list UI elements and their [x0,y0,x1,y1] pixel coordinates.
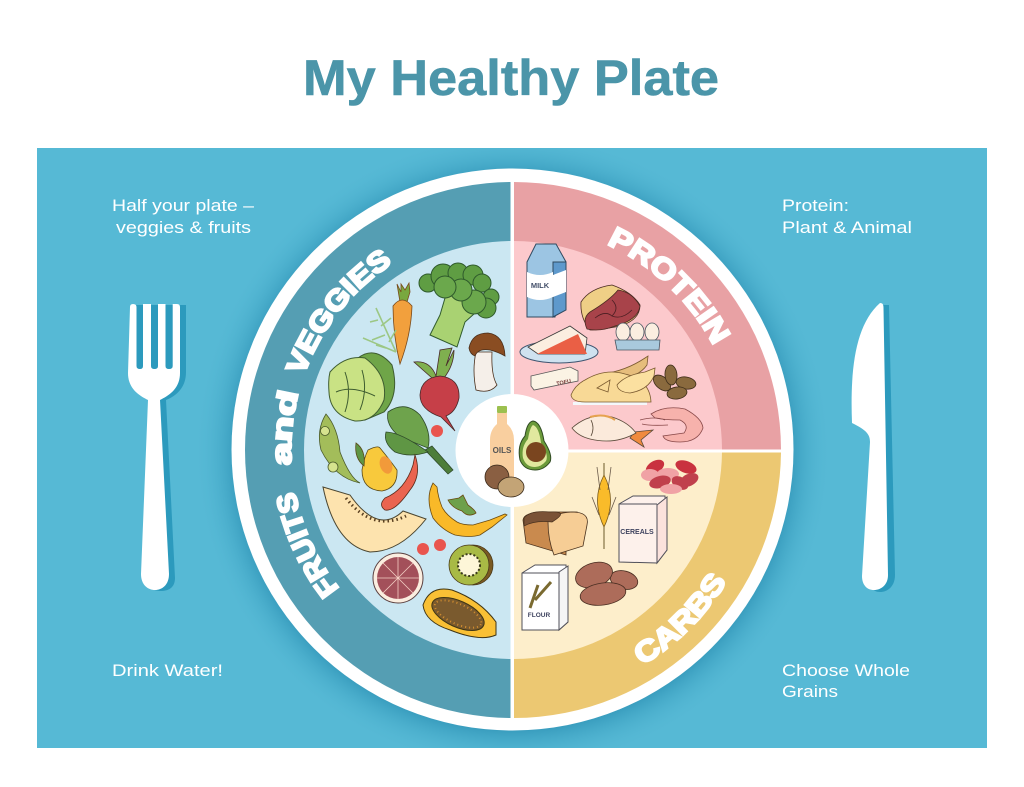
food: broccoli [419,263,499,347]
food: fish [572,416,653,447]
curved label: fruits and veggies [274,250,390,600]
curved label: fruits and veggies: FRUITS [276,492,340,600]
food: spinach [385,407,453,474]
food: chili [382,455,418,510]
plate [232,168,794,730]
curved label: fruits and veggies: and [274,390,300,466]
food: roast chicken [571,356,655,405]
food: potatoes [572,558,640,608]
label: drink water: Drink Water! [112,661,223,680]
label: whole grains [782,661,910,701]
food: carrot [393,283,412,364]
food: cheese on plate [520,326,598,363]
food: cabbage [329,353,395,421]
food: mushroom [469,333,505,391]
inner: veggies [304,241,510,659]
label: half your plate [112,196,255,237]
band: protein [514,182,781,450]
food: rosemary [363,308,396,352]
food: almonds [650,365,697,400]
food: shrimp [640,408,703,442]
food: banana [429,483,507,536]
food: tofu [531,367,578,390]
cereals text: CEREALS [620,529,654,536]
food: wheat [592,463,616,549]
curved label: carbs: CARBS [634,573,725,662]
inner: carbs [514,452,722,659]
label: protein: Plant & Animal [782,218,912,237]
band: carbs [514,452,781,718]
food: beet [414,348,459,431]
plate shadow [216,155,810,748]
milk text: MILK [531,281,550,290]
placemat panel [37,148,987,748]
plate rim [232,168,794,730]
food: papaya [423,589,496,638]
label: whole grains: Grains [782,682,838,701]
food: pod [319,414,360,483]
food: tofu: TOFU [556,379,572,388]
food: oil bottle [490,406,514,482]
food: grapefruit [373,553,423,603]
label: half your plate: veggies & fruits [116,218,251,237]
inner: protein [514,241,722,450]
curved label: protein: PROTEIN [607,226,732,346]
food: milk carton [527,244,566,317]
food: melon [323,487,426,552]
food: bread loaf [523,512,587,555]
food: meat [581,285,640,330]
label: protein: Protein: [782,196,849,215]
food: kidney beans [641,457,701,494]
food: flour bag [522,565,568,630]
centre circle [456,394,568,507]
curved label: fruits and veggies: VEGGIES [284,250,390,370]
food: cereals box [619,496,667,563]
icon: knife [852,303,895,592]
food: walnuts [485,465,524,497]
oils text: OILS [493,446,512,455]
flour text: FLOUR [528,612,550,619]
food: berries [417,425,446,555]
label: half your plate: Half your plate – [112,196,255,215]
band: fruits and veggies [245,182,510,718]
food: avocado [519,421,551,470]
label: whole grains: Choose Whole [782,661,910,680]
title: My Healthy Plate [303,50,719,106]
icon: fork [128,304,186,591]
food: pear [356,443,397,491]
food: eggs [615,323,660,350]
food: kiwi [449,545,493,585]
label: protein [782,196,912,237]
